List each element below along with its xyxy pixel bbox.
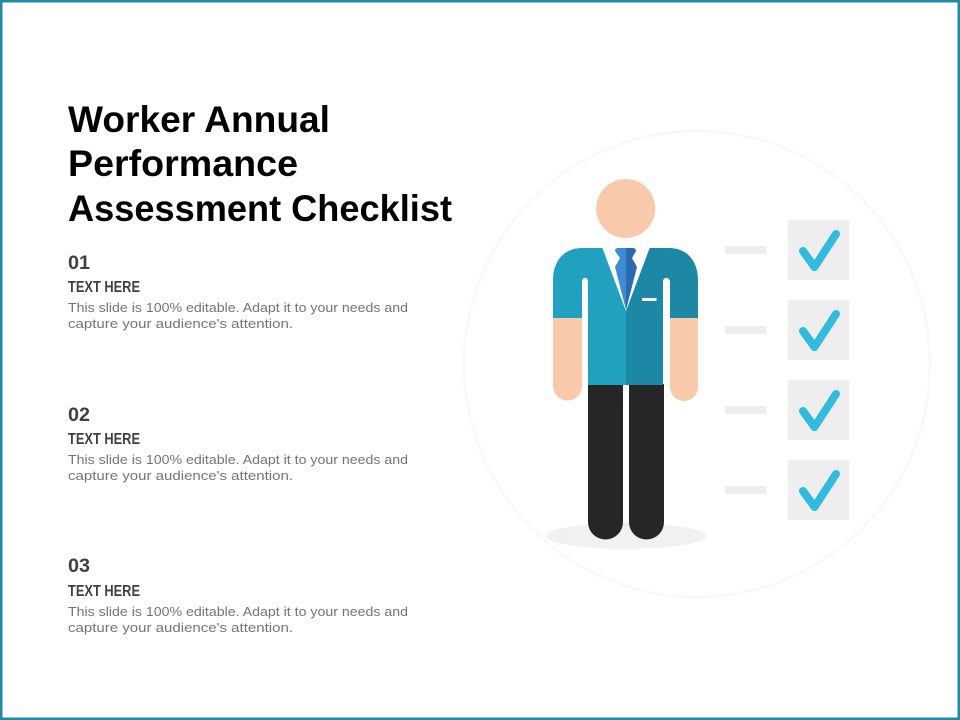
text block 02: capture your audience's attention. [68, 468, 293, 483]
text block 02 [68, 405, 408, 483]
title: Assessment Checklist [68, 188, 452, 229]
text block 02: 02 [68, 405, 90, 426]
arms [553, 316, 698, 401]
jacket right [626, 248, 698, 385]
checklist row 4 [725, 460, 849, 520]
text block 02: This slide is 100% editable. Adapt it to your needs and [68, 452, 408, 467]
title: Worker Annual [68, 99, 330, 140]
text block 02: TEXT HERE [68, 431, 140, 448]
trousers [588, 384, 664, 540]
text block 03: TEXT HERE [68, 583, 140, 600]
background circle [464, 131, 930, 597]
text block 01: 01 [68, 253, 90, 274]
pocket square [642, 298, 656, 301]
icon: worker figure [553, 179, 698, 540]
text block 03 [68, 556, 408, 635]
text block 03: capture your audience's attention. [68, 620, 293, 635]
title: Performance [68, 143, 298, 184]
shirt collar [602, 247, 650, 311]
title [68, 99, 452, 229]
text block 03: This slide is 100% editable. Adapt it to your needs and [68, 604, 408, 619]
checklist row 3 [725, 380, 849, 440]
checklist row 2 [725, 300, 849, 360]
checklist row 1 [725, 220, 849, 280]
text block 01 [68, 253, 408, 331]
jacket left [553, 248, 626, 385]
text block 01: TEXT HERE [68, 279, 140, 296]
text block 01: capture your audience's attention. [68, 316, 293, 331]
ground shadow [546, 523, 706, 549]
text block 01: This slide is 100% editable. Adapt it to your needs and [68, 300, 408, 315]
text block 03: 03 [68, 556, 90, 577]
head [596, 179, 655, 238]
tie [615, 248, 637, 310]
